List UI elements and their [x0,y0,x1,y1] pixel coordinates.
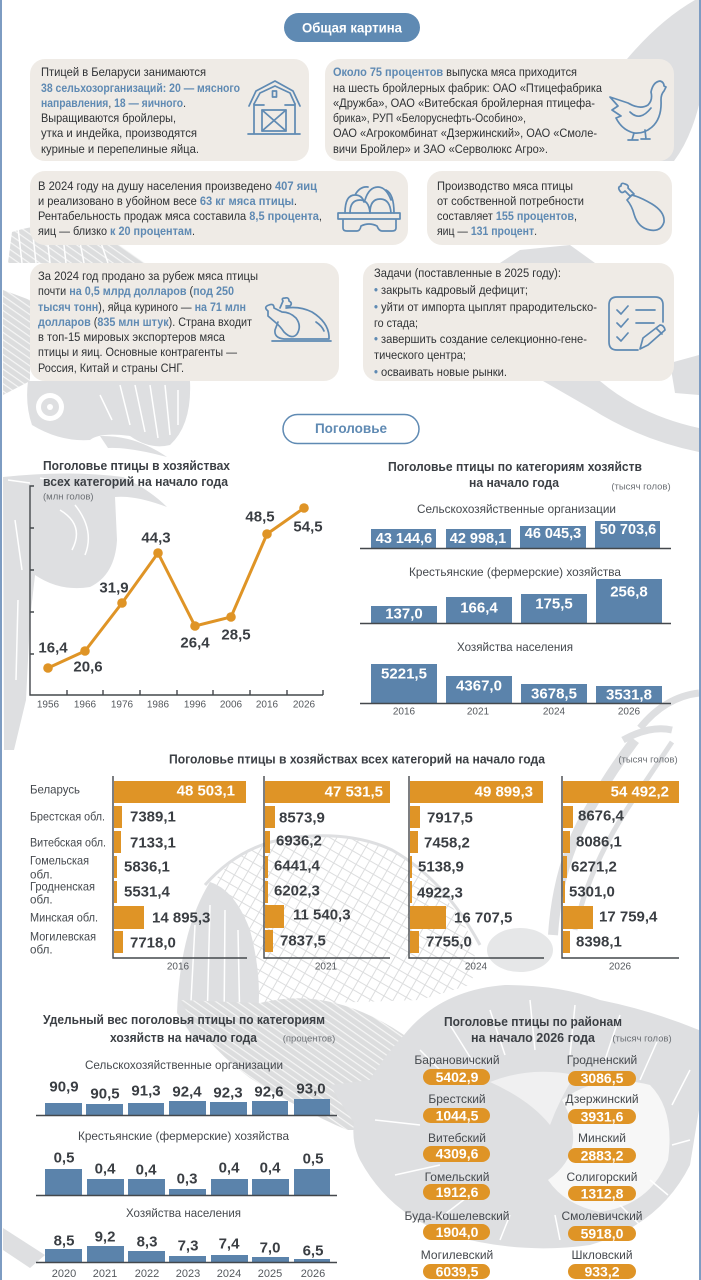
bars 2024: 49 899,3 [475,784,533,800]
bars 2024: 7458,2 [424,834,470,852]
chart: line chart of poultry stock 1956-2026 [30,459,323,710]
bars 2021: 8573,9 [279,810,325,826]
panel: tasks: • закрыть кадровый дефицит; [374,283,528,297]
chart: line chart of poultry stock 1956-2026: 31,9 [99,580,129,596]
panel: broiler factories: ОАО «Агрокомбинат «Дзержинский», ОАО «Смоле- [333,126,597,140]
bars 2024: 7917,5 [427,810,473,826]
chart: stock by farm category [360,460,671,718]
chart: share by farm category: 0,4 [219,1160,240,1176]
bars 2024: 4922,3 [417,884,463,902]
chart: share by farm category: 2024 [217,1268,241,1280]
region labels: Беларусь [30,784,80,796]
icon: chicken [610,81,666,140]
right district column: 3086,5 [581,1070,624,1086]
panel: export [30,263,339,381]
region labels: Гомельская [30,854,89,868]
panel: per capita production: яиц — близко к 20 процентам. [38,224,195,238]
panel: poultry organisations: 38 сельхозорганизаций: 20 — мясного [41,81,240,95]
chart: stock by farm category: 4367,0 [456,678,502,694]
left district column: 5402,9 [436,1069,479,1085]
chart: share by farm category: 2023 [176,1268,200,1280]
chart title: на начало года [469,476,560,490]
right district column: 2883,2 [581,1148,624,1164]
bars 2021: 11 540,3 [293,906,351,924]
left district column: Могилевский [421,1248,493,1262]
panel: poultry organisations: куриные и перепелиные яйца. [41,142,199,156]
bars 2024 [409,776,544,972]
chart: line chart of poultry stock 1956-2026: 20,6 [73,658,103,676]
panel: export: тысяч тонн), яйца куриного — на 71 млн [38,300,246,314]
right district column: Дзержинский [565,1092,639,1106]
heading pill: Общая картина: Общая картина [302,20,402,36]
chart: share by farm category: 0,5 [303,1150,323,1168]
left district column: 1912,6 [436,1184,479,1200]
bars 2021: 6202,3 [274,882,320,900]
bars 2024: 5138,9 [418,858,464,876]
panel: broiler factories: на шесть бройлерных фабрик: ОАО «Птицефабрика [333,81,602,95]
panel: broiler factories: вичи Бройлер» и ЗАО «Серволюкс Агро». [333,142,548,156]
chart: stock by farm category: Крестьянские (фермерские) хозяйства [409,565,621,579]
panel: broiler factories: «Дружба», ОАО «Витебская бройлерная птицефа- [333,96,595,110]
panel: per capita production: и реализовано в убойном весе 63 кг мяса птицы. [38,194,297,208]
left district column: 4309,6 [436,1146,479,1162]
panel: tasks: тического центра; [374,348,466,362]
bars 2016: 7718,0 [130,934,176,952]
bars 2016: 5531,4 [124,884,171,900]
chart title: Поголовье птицы в хозяйствах [43,459,230,473]
chart: line chart of poultry stock 1956-2026: 1956 [37,700,60,710]
chart: stock by farm category: 46 045,3 [525,526,581,542]
chart: share by farm category: 0,4 [260,1160,281,1176]
bars 2016 [113,776,247,972]
chart title [444,1015,672,1045]
left district column: 1044,5 [436,1108,479,1124]
bars 2026: 6271,2 [571,858,617,876]
right district column: Минский [578,1131,626,1145]
chart: line chart of poultry stock 1956-2026: 54,5 [293,518,323,536]
chart: share by farm category: 0,4 [95,1160,116,1178]
chart: stock by farm category: Сельскохозяйственные организации [417,502,616,516]
chart: share by farm category: 93,0 [296,1080,326,1098]
chart: stock by farm category: 42 998,1 [450,531,506,547]
chart: share by farm category: 92,3 [213,1084,243,1102]
chart: stock by farm category: 256,8 [610,584,648,600]
panel: tasks: • завершить создание селекционно-гене- [374,332,587,346]
chart: line chart of poultry stock 1956-2026: 16,4 [38,640,68,656]
chart: line chart of poultry stock 1956-2026: 1976 [111,700,134,710]
right district column: 3931,6 [581,1108,624,1124]
chart title: на начало 2026 года [471,1031,596,1045]
icon: drumstick [619,183,664,230]
chart title [43,1013,335,1045]
chart: share by farm category: 91,3 [131,1082,161,1100]
panel: self-sufficiency [427,171,672,245]
bars 2016: 14 895,3 [152,910,210,926]
icon: roast chicken [266,298,331,341]
panel: per capita production [30,171,408,245]
chart: share by farm category: 2020 [52,1268,76,1280]
chart title [43,459,230,502]
panel: poultry organisations: Выращиваются бройлеры, [41,111,176,125]
right district column: Шкловский [571,1248,633,1262]
heading pill: Поголовье [283,414,419,444]
chart: share by farm category: 8,3 [137,1234,157,1250]
chart: stock by farm category: 137,0 [385,606,423,622]
chart: share by farm category: 2025 [258,1268,282,1280]
chart: stock by farm category: 2026 [618,706,641,718]
bars 2021 [264,776,390,972]
chart: share by farm category: 2026 [301,1268,325,1280]
chart: share by farm category: 7,3 [178,1238,198,1254]
panel: tasks [363,263,674,381]
right district column: Гродненский [567,1053,637,1067]
region labels: Могилевская [30,930,96,944]
chart: line chart of poultry stock 1956-2026: 1966 [74,700,97,710]
heading pill: Общая картина [284,13,420,42]
panel: poultry organisations [30,59,309,161]
chart: line chart of poultry stock 1956-2026: 44,3 [141,530,171,546]
region labels: Минская обл. [30,912,98,924]
panel: tasks: • осваивать новые рынки. [374,365,507,379]
chart: line chart of poultry stock 1956-2026: 2026 [293,700,316,710]
chart title: (процентов) [283,1034,335,1044]
bars 2026: 8676,4 [578,808,625,824]
chart: share by farm category: 6,5 [303,1242,323,1260]
chart title [388,460,671,492]
chart: share by farm category: 92,6 [254,1084,284,1100]
chart: share by farm category [36,1013,337,1280]
panel: per capita production: В 2024 году на душу населения произведено 407 яиц [38,179,317,193]
bars 2016: 2016 [167,962,190,972]
panel: per capita production: Рентабельность продаж мяса составила 8,5 процента, [38,209,322,223]
bars 2026: 5301,0 [569,884,615,900]
panel: self-sufficiency: Производство мяса птицы [437,179,573,193]
bars 2026: 2026 [609,962,632,972]
chart: share by farm category: 0,5 [54,1150,74,1166]
left district column: 1904,0 [436,1224,479,1240]
chart: share by farm category: 2022 [135,1268,159,1280]
panel: poultry organisations: направления, 18 — яичного. [41,96,186,110]
bars 2016: 7133,1 [130,834,176,852]
panel: export: в топ-15 мировых экспортеров мяса [38,330,225,344]
chart: share by farm category: Хозяйства населения [126,1206,241,1220]
chart: share by farm category: 8,5 [54,1232,74,1250]
chart: stock by farm category: 43 144,6 [376,531,432,547]
panel: poultry organisations: Птицей в Беларуси занимаются [41,65,206,79]
icon: barn [248,81,300,134]
region labels: обл. [30,868,53,882]
panel: self-sufficiency: составляет 155 процентов, [437,209,577,223]
right district column: 1312,8 [581,1186,624,1202]
bars 2026: 8398,1 [576,934,622,950]
region labels: обл. [30,894,53,906]
bars 2021: 6441,4 [274,858,321,874]
panel: tasks: Задачи (поставленные в 2025 году): [374,266,561,280]
region labels: Гродненская [30,880,95,894]
chart: line chart of poultry stock 1956-2026: 2016 [256,700,279,710]
left district column: Буда-Кошелевский [404,1209,510,1223]
bars 2026: 8086,1 [576,834,622,850]
chart: share by farm category: 7,4 [219,1236,240,1252]
chart title: (тысяч голов) [618,754,678,766]
icon: checklist and pencil [609,297,665,350]
right district column: Смолевичский [562,1209,642,1223]
left district column: Витебский [428,1131,486,1145]
chart title: всех категорий на начало года [43,475,229,489]
chart: share by farm category: 92,4 [172,1084,202,1100]
chart: stock by farm category: 2016 [393,706,416,718]
chart: stock by farm category: 3531,8 [606,686,652,704]
chart title: Удельный вес поголовья птицы по категориям [43,1013,325,1027]
chart: stock by farm category: 175,5 [535,596,573,612]
region labels: Витебская обл. [30,836,106,850]
chart: share by farm category: Крестьянские (фермерские) хозяйства [78,1129,289,1143]
right district column: Солигорский [567,1170,637,1184]
chart: line chart of poultry stock 1956-2026: 2006 [220,700,243,710]
chart: stock by farm category: 166,4 [460,600,498,616]
bars 2016: 48 503,1 [177,782,235,800]
bars 2021: 47 531,5 [325,784,383,800]
chart: line chart of poultry stock 1956-2026: 26,4 [180,634,210,652]
region labels: Брестская обл. [30,810,105,824]
chart: stock by farm category: 50 703,6 [600,522,656,538]
panel: self-sufficiency: от собственной потребности [437,194,584,208]
left district column: 6039,5 [436,1264,479,1280]
chart title: Поголовье птицы по районам [444,1015,622,1029]
bars 2024: 16 707,5 [454,910,512,926]
panel: broiler factories [325,59,674,161]
chart: stock by farm category: 5221,5 [381,666,427,682]
panel: export: За 2024 год продано за рубеж мяса птицы [38,269,258,283]
bars 2024: 2024 [465,962,488,972]
panel: export: Россия, Китай и страны СНГ. [38,361,184,375]
bars 2024: 7755,0 [426,934,472,950]
chart title: Поголовье птицы в хозяйствах всех категорий на начало года [169,752,546,766]
chart: stock by farm category: 2024 [543,706,566,718]
chart: stock by farm category: 2021 [467,706,490,718]
chart: share by farm category: 7,0 [260,1240,280,1256]
left district column: Гомельский [425,1170,489,1184]
chart: stock by farm category: 3678,5 [531,686,577,702]
panel: self-sufficiency: яиц — 131 процент. [437,224,537,238]
panel: tasks: • уйти от импорта цыплят прародительско- [374,300,597,314]
chart: share by farm category: 90,5 [90,1086,120,1102]
chart: share by farm category: 90,9 [49,1078,79,1096]
panel: tasks: го стада; [374,316,418,330]
chart: share by farm category: 9,2 [95,1228,115,1246]
right district column: 933,2 [584,1264,620,1280]
chart title: Поголовье птицы по категориям хозяйств [388,460,642,474]
region labels [30,784,106,956]
bars 2026: 54 492,2 [611,784,669,800]
icon: egg tray [338,187,400,231]
chart: stock by farm category: Хозяйства населения [457,640,573,654]
panel: poultry organisations: утка и индейка, производятся [41,126,197,140]
chart title: (млн голов) [43,492,94,502]
panel: export: почти на 0,5 млрд долларов (под 250 [38,284,234,298]
chart title: хозяйств на начало года [110,1031,258,1045]
panel: export: долларов (835 млн штук). Страна входит [38,315,252,329]
chart: stock by district [404,1015,672,1280]
bars 2016: 5836,1 [124,858,170,876]
right district column: 5918,0 [581,1226,624,1242]
bars 2021: 6936,2 [276,832,322,850]
chart: share by farm category: 0,3 [177,1170,197,1188]
chart: line chart of poultry stock 1956-2026: 1986 [147,700,170,710]
bars 2021: 2021 [315,962,338,972]
bars 2021: 7837,5 [280,932,326,950]
chart: line chart of poultry stock 1956-2026: 1996 [184,700,207,710]
chart title: (тысяч голов) [612,1034,672,1044]
panel: broiler factories: Около 75 процентов выпуска мяса приходится [333,65,577,79]
right district column [562,1053,642,1280]
bars 2016: 7389,1 [130,808,176,826]
chart title: (тысяч голов) [611,482,671,492]
heading pill: Поголовье: Поголовье [315,421,388,436]
chart: line chart of poultry stock 1956-2026: 48,5 [245,508,275,526]
bars 2026 [562,776,679,972]
panel: broiler factories: брика», РУП «Белоруснефть-Особино», [333,111,526,125]
chart: line chart of poultry stock 1956-2026: 28,5 [221,626,251,644]
left district column: Барановичский [414,1053,500,1067]
chart: stock by region [30,752,679,972]
left district column: Брестский [428,1092,486,1106]
left district column [404,1053,510,1280]
chart: share by farm category: Сельскохозяйственные организации [85,1058,283,1072]
bars 2026: 17 759,4 [599,908,658,926]
region labels: обл. [30,944,53,956]
chart: share by farm category: 2021 [93,1268,117,1280]
panel: export: птицы и яиц. Основные контрагенты — [38,345,238,359]
chart: share by farm category: 0,4 [136,1162,157,1178]
